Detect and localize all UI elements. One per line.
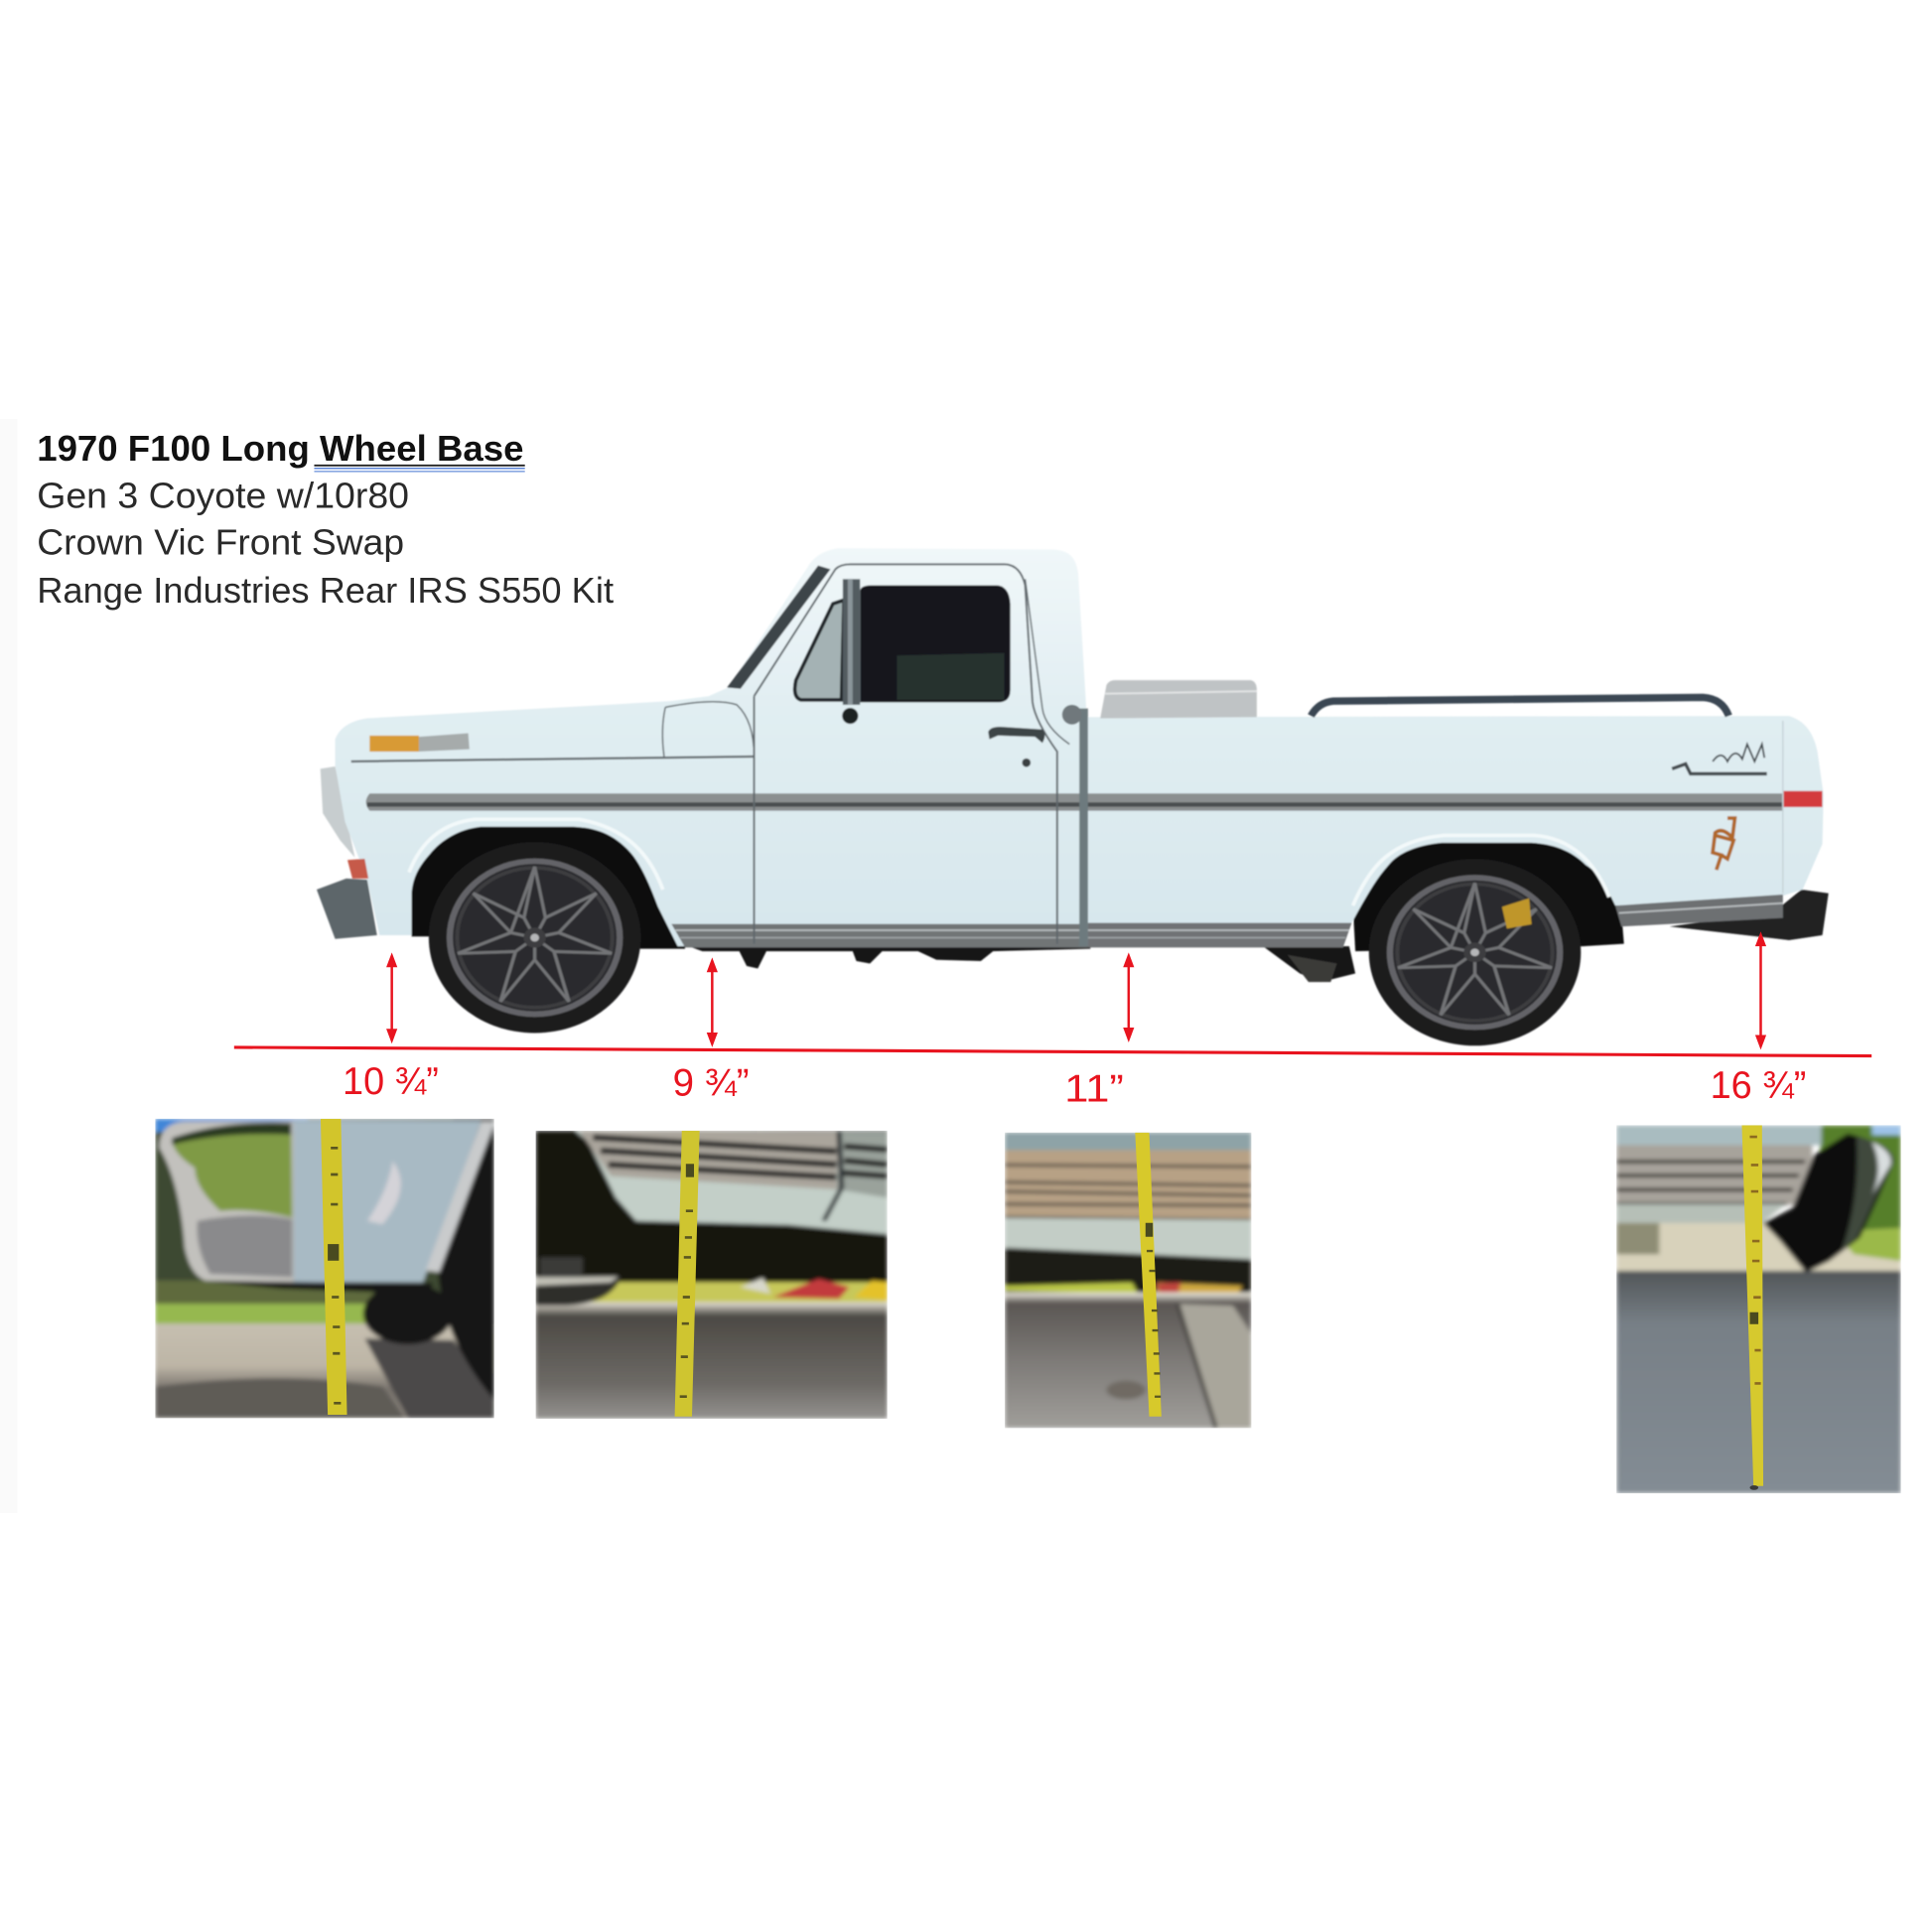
tape measure [321, 1119, 347, 1415]
title: 1970 F100 Long Wheel Base [37, 428, 523, 469]
vent window [795, 600, 844, 700]
door latch [1062, 705, 1082, 725]
toolbox [1100, 680, 1257, 719]
photo: rear rocker measurement [1005, 1133, 1251, 1428]
title block [37, 428, 614, 611]
wheel arch front [412, 819, 690, 949]
photo: rear bumper measurement [1616, 1125, 1901, 1493]
front wheel [429, 842, 640, 1034]
label 11: 11” [1064, 1068, 1124, 1111]
underbody shadow [675, 941, 1355, 982]
arrow: rear bumper height [1755, 931, 1766, 1049]
rear bumper [1670, 890, 1829, 940]
mirror post [843, 579, 860, 705]
label 10 3/4: 10 ¾” [343, 1060, 439, 1103]
rear wheel [1369, 859, 1581, 1045]
hood marker chrome [419, 733, 470, 752]
fleetside emblem [1672, 745, 1767, 773]
side window [860, 586, 1011, 702]
monkey decal [1713, 818, 1734, 870]
rear rocker trim [1615, 895, 1783, 926]
bed rail [1311, 697, 1728, 716]
truck body [336, 548, 1824, 946]
spec line 3: Range Industries Rear IRS S550 Kit [37, 570, 614, 611]
photo: front rocker measurement [536, 1131, 888, 1419]
door handle [988, 727, 1044, 743]
mirror [842, 708, 858, 724]
hood marker amber [369, 736, 419, 752]
front side marker red [347, 859, 368, 879]
front rocker trim [671, 924, 1088, 947]
title underline [314, 465, 525, 473]
truck illustration [317, 548, 1829, 1045]
door lock [1022, 759, 1031, 767]
cab rear post [1079, 709, 1088, 946]
brake caliper [1502, 898, 1532, 928]
arrow: front rocker height [707, 957, 718, 1047]
bed rocker trim [1088, 923, 1351, 947]
tape measure [1741, 1125, 1763, 1490]
tail marker [1783, 791, 1823, 807]
scan background band [0, 419, 17, 1513]
arrow: rear rocker height [1123, 952, 1134, 1042]
spec line 1: Gen 3 Coyote w/10r80 [37, 475, 409, 515]
tape measure [675, 1131, 700, 1417]
wheel arch rear [1349, 838, 1624, 951]
front bumper [317, 879, 377, 939]
measurement labels [343, 1060, 1806, 1111]
arrow: front bumper height [386, 952, 397, 1043]
body lines [351, 564, 1783, 944]
exhaust tip [1288, 955, 1337, 982]
ground line [234, 1047, 1871, 1056]
side trim strip [366, 793, 1783, 811]
label 16 3/4: 16 ¾” [1711, 1064, 1806, 1107]
spec line 2: Crown Vic Front Swap [37, 521, 404, 562]
tape measure [1135, 1133, 1162, 1417]
flare highlights [409, 819, 1609, 905]
photo: front bumper measurement [155, 1119, 495, 1418]
headlight bezel [321, 766, 354, 858]
label 9 3/4: 9 ¾” [673, 1061, 750, 1104]
windshield [727, 566, 830, 689]
